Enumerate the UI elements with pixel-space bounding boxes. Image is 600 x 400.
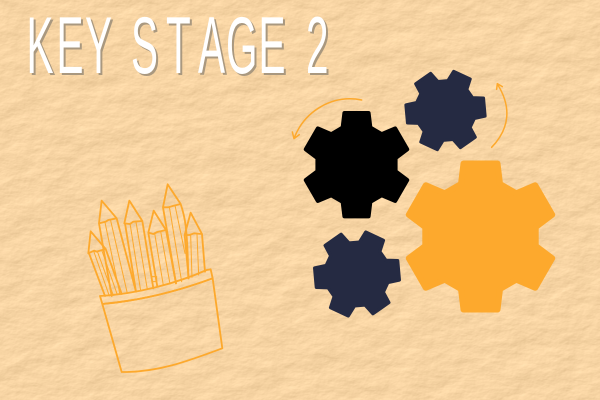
icon: pencils in a cup: [88, 184, 222, 372]
pencil 6: [185, 213, 205, 278]
gear: navy top: [394, 59, 497, 162]
pencil 3: [124, 201, 153, 292]
gear: orange large: [409, 164, 552, 310]
gear: black: [306, 113, 407, 216]
arrow: upward beside navy gear: [492, 84, 507, 147]
gear: navy bottom: [302, 219, 412, 329]
cup: [100, 269, 222, 372]
arrow: counter-clockwise over black gear: [292, 99, 362, 139]
pencil 1: [88, 231, 122, 296]
pencil 2: [99, 201, 136, 296]
title: KEY STAGE 2: [27, 0, 329, 91]
pencil 5: [163, 184, 188, 283]
pencil 4: [148, 211, 176, 287]
